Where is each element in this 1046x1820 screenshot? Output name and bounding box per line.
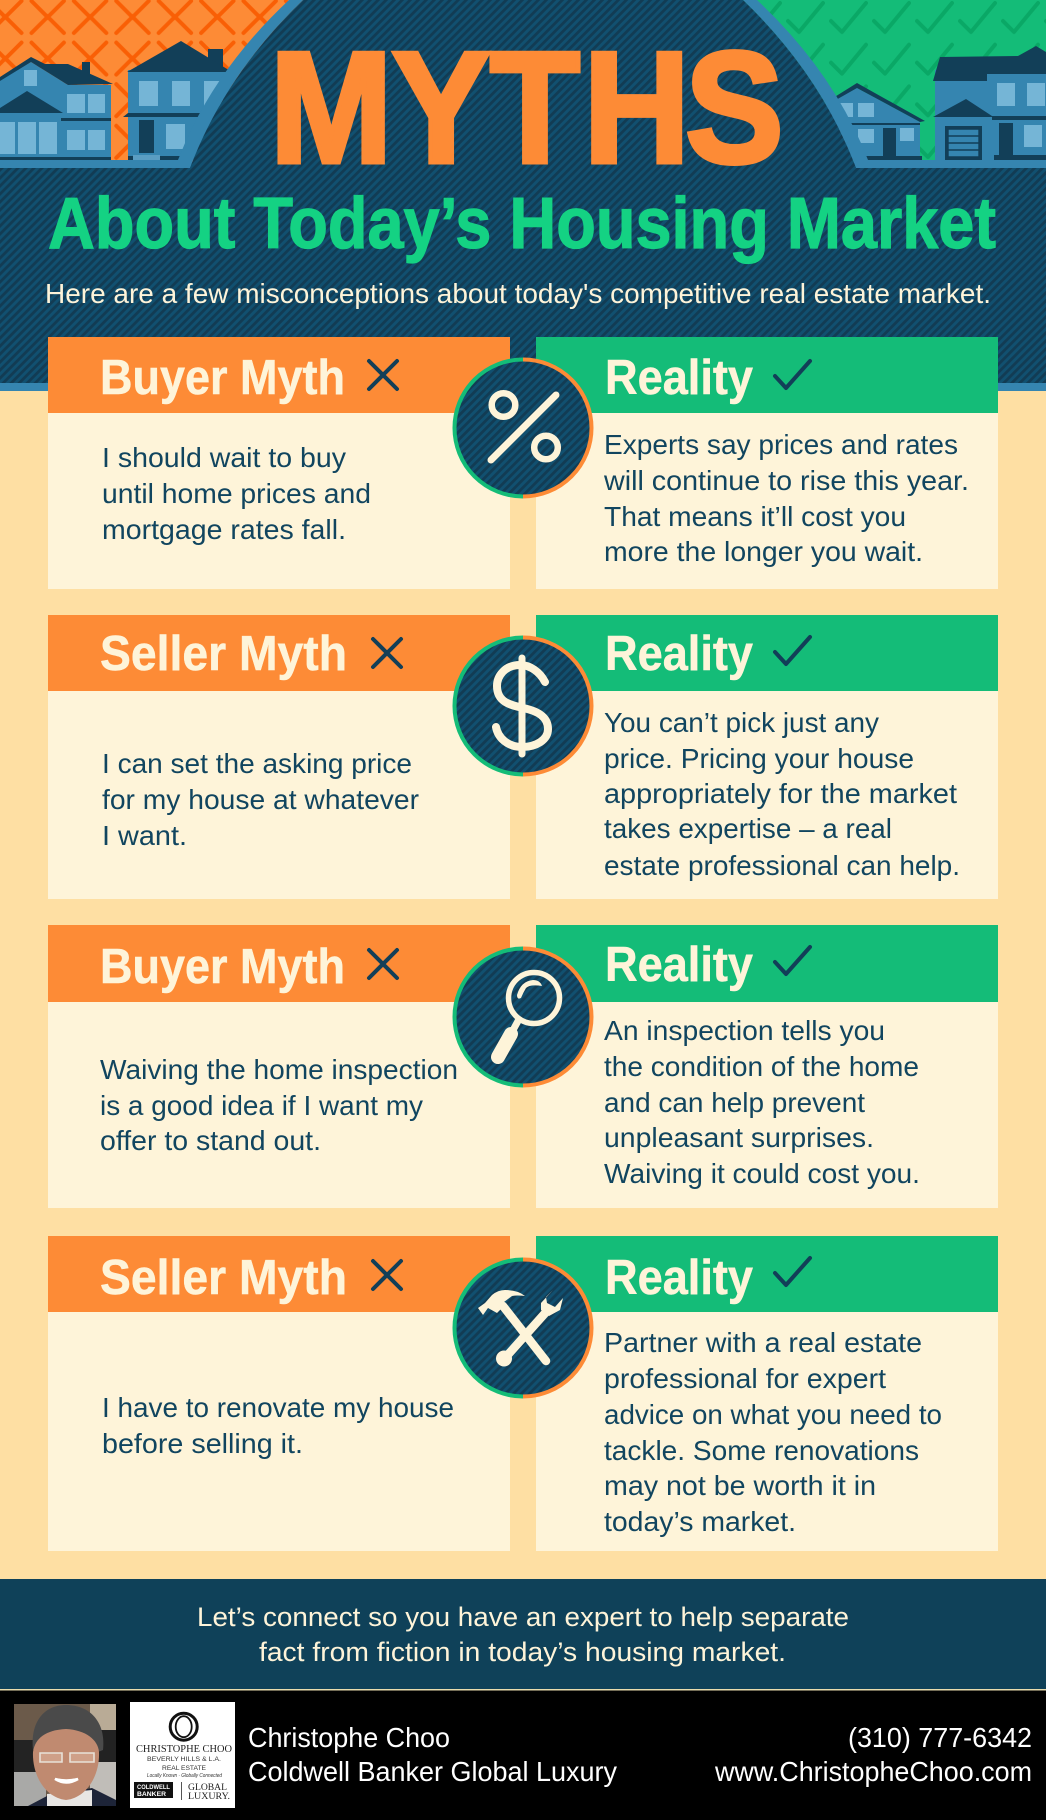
panel: reality 3: the condition of the home	[604, 1051, 919, 1082]
panel: seller myth 2: Seller Myth	[100, 1251, 347, 1305]
title: MYTHS	[270, 20, 783, 196]
panel: reality 4: tackle. Some renovations	[604, 1435, 919, 1466]
panel: reality 4: Partner with a real estate	[604, 1327, 922, 1358]
panel: reality 1: Experts say prices and rates	[604, 429, 958, 460]
panel: seller myth 1: for my house at whatever	[102, 784, 419, 815]
call to action text	[197, 1602, 849, 1667]
contact details	[714, 1722, 1032, 1787]
panel: seller myth 2: before selling it.	[102, 1428, 303, 1459]
panel: reality 3: and can help prevent	[604, 1087, 865, 1118]
icon: x mark	[369, 361, 397, 389]
header background: striped navy band	[0, 0, 1046, 391]
icon: garage house	[933, 46, 1046, 162]
panel: buyer myth 1	[48, 337, 510, 589]
icon: percent badge	[454, 360, 592, 496]
footer bar	[0, 1689, 1046, 1820]
logo card: BANKER	[137, 1792, 167, 1798]
panel: buyer myth 1: mortgage rates fall.	[102, 514, 346, 545]
icon: left houses	[0, 41, 232, 160]
panel: reality 4: may not be worth it in	[604, 1470, 876, 1501]
panel: reality 1: Reality	[605, 351, 753, 405]
logo card: BEVERLY HILLS & L.A.	[147, 1757, 221, 1763]
striped dome	[190, 0, 856, 168]
icon: x mark	[369, 950, 397, 978]
icon: logo emblem	[170, 1713, 197, 1740]
icon: right houses	[826, 46, 1046, 162]
icon: gabled house	[826, 83, 925, 160]
icon: check mark	[775, 947, 810, 974]
call to action band	[0, 1579, 1046, 1689]
logo card: LUXURY.	[188, 1791, 230, 1801]
panel: buyer myth 1: I should wait to buy	[102, 442, 346, 473]
call to action text: Let’s connect so you have an expert to help separate	[197, 1602, 849, 1632]
panel: reality 2: Reality	[605, 627, 753, 681]
icon: magnifier badge	[454, 948, 592, 1086]
panel: reality 3: Waiving it could cost you.	[604, 1158, 920, 1189]
panel: seller myth 1: I can set the asking price	[102, 748, 412, 779]
logo card: COLDWELL	[137, 1785, 170, 1791]
logo card: GLOBAL	[188, 1782, 227, 1792]
panel: seller myth 1	[48, 615, 510, 899]
logo card: Locally Known · Globally Connected	[147, 1773, 222, 1779]
agent name	[248, 1722, 617, 1787]
logo card	[130, 1702, 235, 1808]
panel: reality 4: Reality	[605, 1251, 753, 1305]
panel: orange pattern backdrop	[0, 0, 310, 162]
panel: reality 1: will continue to rise this year.	[603, 465, 969, 496]
icon: check mark	[775, 361, 810, 388]
icon: tools badge	[454, 1260, 592, 1396]
panel: reality 3: unpleasant surprises.	[604, 1122, 874, 1153]
logo card: REAL ESTATE	[162, 1766, 206, 1772]
panel: buyer myth 1: Buyer Myth	[100, 351, 345, 405]
panel: reality 4: advice on what you need to	[604, 1399, 942, 1430]
panel: reality 1: more the longer you wait.	[604, 536, 923, 567]
icon: two storey house	[123, 41, 232, 160]
panel: buyer myth 2: Buyer Myth	[100, 940, 345, 994]
icon: dollar badge	[454, 638, 592, 774]
panel: reality 1: That means it’ll cost you	[604, 501, 906, 532]
panel: reality 2: You can’t pick just any	[604, 707, 879, 738]
contact details: www.ChristopheChoo.com	[714, 1756, 1032, 1787]
intro text: Here are a few misconceptions about today's competitive real estate market.	[45, 278, 991, 309]
agent name: Christophe Choo	[248, 1722, 450, 1753]
icon: large house	[0, 57, 113, 160]
panel: seller myth 1: Seller Myth	[100, 627, 347, 681]
panel: buyer myth 1: until home prices and	[102, 478, 371, 509]
panel: reality 3: Reality	[605, 938, 753, 992]
panel: seller myth 1: I want.	[102, 820, 187, 851]
panel: reality 1	[536, 337, 998, 589]
panel: buyer myth 2: is a good idea if I want my	[100, 1090, 423, 1121]
dome outline and ground strips	[0, 0, 1046, 168]
panel: reality 4	[536, 1236, 998, 1551]
panel: reality 3: An inspection tells you	[604, 1015, 885, 1046]
icon: x mark	[373, 1261, 401, 1289]
panel: reality 2: estate professional can help.	[604, 850, 960, 881]
icon: check mark	[775, 1258, 810, 1285]
icon: x mark	[373, 639, 401, 667]
agent name: Coldwell Banker Global Luxury	[248, 1756, 617, 1787]
header base strip	[0, 383, 1046, 391]
call to action text: fact from fiction in today’s housing market.	[259, 1637, 786, 1667]
panel: buyer myth 2: Waiving the home inspection	[100, 1054, 458, 1085]
panel: reality 2: takes expertise – a real	[604, 813, 892, 844]
panel: reality 2: price. Pricing your house	[604, 743, 914, 774]
panel: reality 4: today’s market.	[604, 1506, 796, 1537]
panel: reality 4: professional for expert	[604, 1363, 886, 1394]
panel: seller myth 2: I have to renovate my house	[102, 1392, 454, 1423]
icon: check mark	[775, 637, 810, 664]
panel: reality 2	[536, 615, 998, 899]
contact details: (310) 777-6342	[848, 1722, 1032, 1753]
panel: green check pattern backdrop	[736, 0, 1046, 162]
panel: reality 2: appropriately for the market	[604, 778, 957, 809]
panel: reality 3	[536, 925, 998, 1208]
panel: buyer myth 2: offer to stand out.	[100, 1125, 321, 1156]
agent photo	[14, 1704, 116, 1806]
panel: buyer myth 2	[48, 925, 510, 1208]
logo card: CHRISTOPHE CHOO	[136, 1744, 232, 1755]
panel: seller myth 2	[48, 1236, 510, 1551]
